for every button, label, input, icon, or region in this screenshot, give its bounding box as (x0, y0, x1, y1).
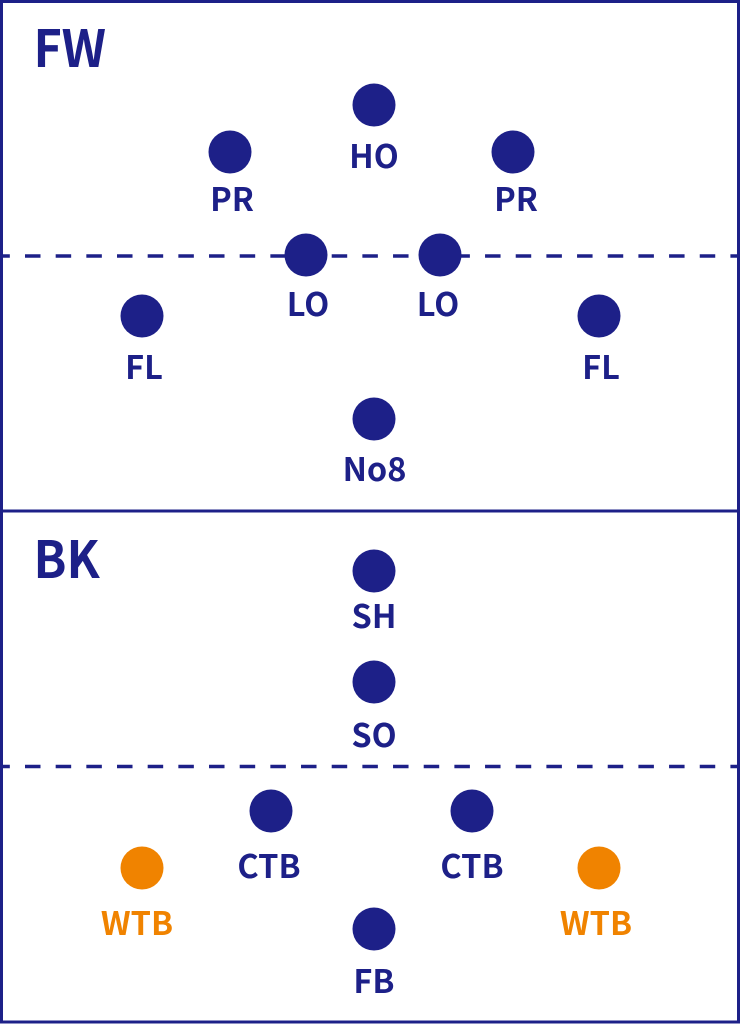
player: FB: FB (353, 956, 395, 1003)
player: WTB left (101, 846, 173, 945)
player: PR left: PR (210, 174, 254, 221)
player: PR right: PR (494, 174, 538, 221)
player: LO left (284, 234, 329, 326)
player: No8 (343, 398, 406, 491)
player: CTB right: CTB (440, 841, 504, 888)
player: WTB right: WTB (560, 898, 632, 945)
player: FL left: FL (125, 342, 163, 389)
player: FL right: FL (582, 342, 620, 389)
player: LO right (417, 234, 462, 326)
player: SO: SO (351, 710, 397, 757)
player: LO left: LO (287, 279, 329, 326)
player: CTB left: CTB (237, 841, 301, 888)
player: SO (351, 660, 397, 757)
player: HO: HO (349, 131, 399, 178)
player: No8: No8 (343, 444, 406, 491)
player: FB (352, 908, 396, 1003)
player: PR left (208, 130, 254, 221)
player: LO right: LO (417, 279, 459, 326)
player: SH: SH (352, 591, 396, 638)
player: CTB right (440, 790, 504, 888)
player: FL right (578, 294, 620, 389)
heading: BK: BK (34, 520, 101, 593)
player: PR right (492, 130, 538, 221)
player: HO (349, 84, 399, 178)
player: FL left (120, 294, 164, 389)
player: WTB right (560, 846, 632, 945)
player: WTB left: WTB (101, 898, 173, 945)
player: SH (352, 550, 396, 638)
heading: FW: FW (34, 9, 106, 82)
player: CTB left (237, 790, 301, 888)
